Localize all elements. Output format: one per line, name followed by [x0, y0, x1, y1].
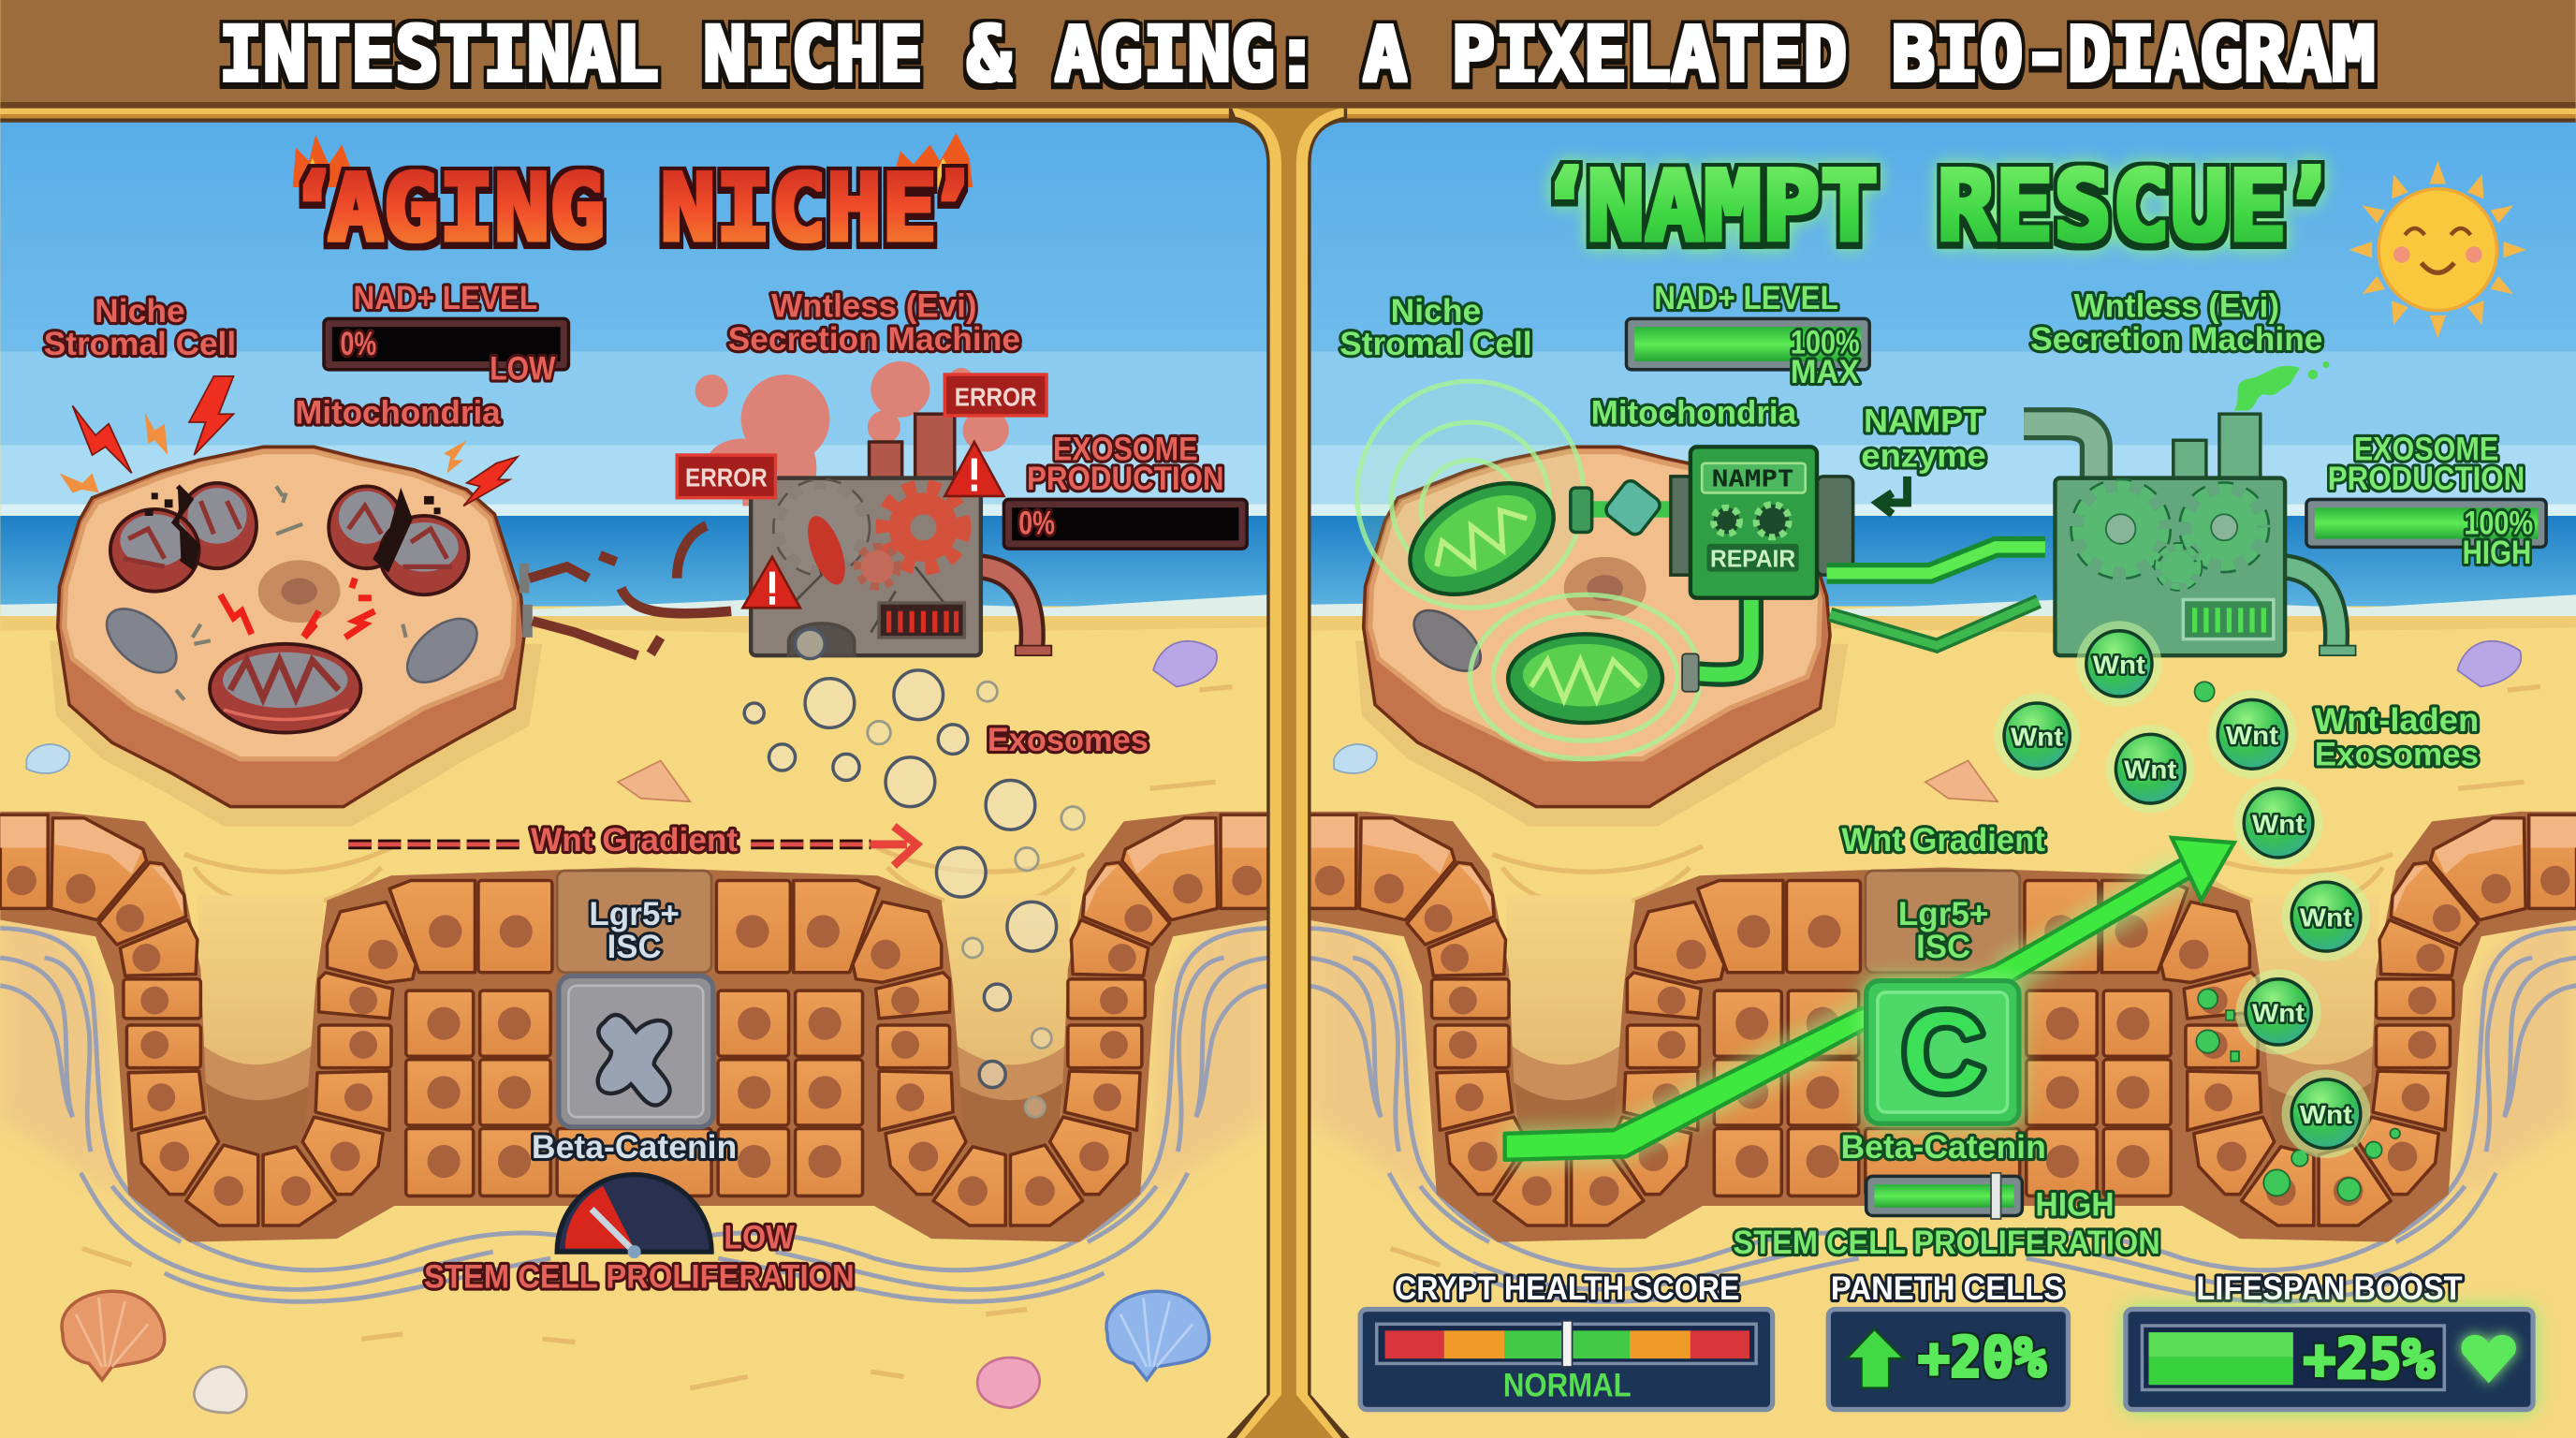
icon: lightning bolts: [59, 376, 518, 506]
icon: inactive beta-catenin: [598, 1015, 670, 1106]
icon: small gear: [857, 547, 897, 586]
background: beach scene: [1309, 122, 2576, 1438]
NAD+ meter: max: [1626, 280, 1869, 390]
icon: broken cables: [520, 526, 731, 655]
icon: gear right: [2187, 490, 2262, 565]
exosome production meter: empty: EXOSOME: [1053, 431, 1197, 467]
label: secretion machine: Wntless (Evi): [2074, 288, 2279, 325]
panel: NAMPT rescue: [1309, 122, 2576, 1438]
label: secretion machine: Secretion Machine: [728, 321, 1020, 358]
arrow: strong wnt gradient: [1505, 838, 2234, 1160]
label: Lgr5+ ISC: [1898, 896, 1988, 965]
icon: orange shell: [62, 1291, 165, 1380]
sub-title: aging niche: [285, 133, 979, 262]
stromal cell: [1355, 447, 1848, 827]
icon: red gear: [883, 486, 964, 568]
icon: overheating vent: [879, 603, 964, 638]
icon: damaged mitochondrion 3: [210, 644, 360, 733]
icon: pale pebble: [1334, 744, 1377, 773]
beta-catenin inactive block: [532, 976, 737, 1166]
heading text: ‘AGING NICHE’: [285, 155, 979, 262]
label: NAMPT enzyme: enzyme: [1861, 437, 1986, 474]
scorecard: paneth cells: PANETH CELLS: [1831, 1270, 2064, 1307]
header band: [0, 0, 2576, 102]
icon: return arrow: [1878, 477, 1908, 514]
label: NAMPT enzyme: [1861, 403, 1986, 514]
icon: NAMPT repair unit: NAMPT: [1712, 464, 1793, 492]
icon: heart: [2461, 1335, 2516, 1383]
stromal cell with damaged organelles: [50, 447, 542, 827]
label: niche stromal cell: [1339, 293, 1532, 362]
gauge: stem cell proliferation low: [424, 1175, 855, 1296]
gauge: stem cell proliferation low: STEM CELL PROLIFERATION: [424, 1259, 855, 1296]
error tag 1: [944, 374, 1046, 416]
stem cell proliferation meter: high: HIGH: [2035, 1186, 2115, 1223]
label: Lgr5+ ISC: Lgr5+: [1898, 896, 1988, 932]
icon: warning triangle left: [742, 557, 800, 608]
label: niche stromal cell: Niche: [1391, 293, 1481, 330]
exosome production meter: high: PRODUCTION: [2328, 461, 2525, 497]
icon: hatch: [789, 624, 855, 655]
icon: inner sparks: [220, 579, 374, 638]
background: beach scene: [0, 122, 1268, 1438]
icon: pink shell: [977, 1357, 1040, 1408]
wnt-laden exosomes: Wnt: [2011, 723, 2063, 752]
icon: repaired mitochondrion 1: [1391, 461, 1573, 617]
NAD+ meter: max: MAX: [1791, 354, 1860, 390]
exosome production meter: high: [2306, 431, 2546, 571]
icon: shells: [26, 641, 1217, 1413]
icon: purple shell: [2457, 641, 2521, 686]
label: Lgr5+ ISC: ISC: [1916, 929, 1970, 965]
NAD+ meter: max: 100%: [1791, 324, 1860, 360]
label: wnt gradient: Wnt Gradient: [1841, 822, 2045, 858]
icon: green vapour: [2234, 366, 2300, 411]
exosome production meter: high: EXOSOME: [2354, 431, 2498, 467]
icon: sun: [2349, 161, 2526, 338]
wnt-laden exosomes: Wnt: [2093, 650, 2145, 679]
label: secretion machine: [2030, 288, 2322, 358]
exosome production meter: high: HIGH: [2463, 535, 2531, 571]
scorecard: paneth cells: [1828, 1270, 2068, 1410]
label: mitochondria: Mitochondria: [295, 395, 501, 432]
icon: warning triangle right: [944, 442, 1003, 496]
label: secretion machine: Secretion Machine: [2030, 321, 2322, 358]
icon: pale pebble: [26, 744, 69, 773]
NAD+ meter: max: NAD+ LEVEL: [1654, 280, 1838, 316]
scorecard: lifespan boost: LIFESPAN BOOST: [2196, 1270, 2463, 1307]
NAD+ meter: low: LOW: [490, 350, 556, 387]
wnt-laden exosomes: [1995, 621, 2370, 1158]
wnt-laden exosomes: Wnt: [2300, 903, 2352, 932]
icon: gear small: [2159, 547, 2198, 586]
scorecard: crypt health score: CRYPT HEALTH SCORE: [1395, 1270, 1740, 1307]
NAD+ meter: low: NAD+ LEVEL: [354, 280, 537, 316]
icon: broken secretion machine: [677, 374, 1051, 659]
arrow: weak wnt gradient: Wnt Gradient: [531, 822, 738, 858]
icon: peach shell: [1925, 760, 1998, 801]
active beta-catenin block: C: [1902, 990, 1984, 1115]
icon: peach shell: [618, 760, 690, 801]
label: wnt-laden exosomes: Exosomes: [2315, 737, 2479, 773]
arrow: weak wnt gradient: [348, 822, 916, 866]
main title: INTESTINAL NICHE & AGING: A PIXELATED BIO-DIAGRAM: [219, 11, 2376, 99]
active beta-catenin block: Beta-Catenin: [1840, 1129, 2046, 1166]
label: niche stromal cell: [44, 293, 236, 362]
wnt-laden exosomes: Wnt: [2252, 998, 2305, 1027]
crypt epithelium: [1309, 812, 2576, 1301]
label: mitochondria: Mitochondria: [1591, 395, 1797, 432]
icon: wnt spores: [2195, 682, 2400, 1201]
icon: NAMPT repair unit: [1571, 447, 1853, 692]
NAD+ meter: low: 0%: [341, 326, 376, 362]
wnt-laden exosomes: Wnt: [2300, 1100, 2352, 1129]
green pipes to machine: [1827, 547, 2045, 646]
sub-title: NAMPT rescue: ‘NAMPT RESCUE’: [1537, 151, 2337, 263]
wnt-laden exosomes: Wnt: [2124, 756, 2176, 785]
exosome production meter: empty: 0%: [1018, 505, 1055, 541]
icon: trapped bubble: [796, 629, 825, 659]
label: NAMPT enzyme: NAMPT: [1864, 403, 1984, 439]
NAD+ meter: low: [324, 280, 568, 387]
active beta-catenin block: [1840, 981, 2046, 1166]
icon: grey mitochondria: [95, 596, 489, 695]
icon: NAMPT repair unit: REPAIR: [1710, 544, 1795, 572]
label: niche stromal cell: Stromal Cell: [44, 326, 236, 362]
icon: debris: [176, 486, 406, 700]
error tag 2: ERROR: [685, 462, 768, 492]
scorecard: lifespan boost: [2126, 1270, 2533, 1410]
panel: aging niche: [0, 122, 1268, 1438]
exosome production meter: empty: PRODUCTION: [1027, 461, 1224, 497]
stem cell proliferation meter: high: STEM CELL PROLIFERATION: [1734, 1225, 2160, 1261]
icon: grey gear: [781, 486, 863, 590]
icon: vent: [2183, 599, 2274, 639]
scorecard: crypt health score: NORMAL: [1503, 1368, 1632, 1404]
label: secretion machine: [728, 288, 1020, 358]
icon: white shell: [194, 1367, 247, 1413]
icon: smoke: [695, 361, 1009, 506]
gauge: stem cell proliferation low: LOW: [724, 1220, 796, 1256]
icon: repaired mitochondrion 2: [1508, 634, 1662, 723]
icon: working secretion machine: [2024, 361, 2356, 655]
scorecard: lifespan boost: +25%: [2303, 1328, 2435, 1392]
wnt-laden exosomes: Wnt: [2226, 721, 2278, 750]
wnt-laden exosomes: Wnt: [2252, 810, 2305, 839]
icon: gear large: [2078, 486, 2163, 572]
icon: energy rings: [1357, 381, 1700, 759]
icon: shells: [1334, 641, 2521, 801]
crypt epithelium: [0, 812, 1268, 1301]
icon: grey mitochondrion: [1403, 599, 1491, 682]
icon: flames: [293, 133, 973, 187]
beta-catenin inactive block: Beta-Catenin: [532, 1129, 737, 1166]
error tag 2: [677, 455, 776, 498]
exosome production meter: empty: [1003, 431, 1247, 549]
scorecard: paneth cells: +20%: [1918, 1326, 2046, 1390]
error tag 1: ERROR: [955, 382, 1037, 411]
icon: purple shell: [1153, 641, 1217, 686]
icon: small gears: [1713, 505, 1789, 537]
label: Lgr5+ ISC: [589, 896, 680, 965]
icon: damaged mitochondrion 1: [110, 483, 256, 592]
exosome bubbles: [744, 670, 1084, 1117]
scorecard: crypt health score: [1360, 1270, 1773, 1410]
stem cell proliferation meter: high: [1734, 1173, 2160, 1261]
label: exosomes: Exosomes: [988, 722, 1149, 758]
icon: damaged mitochondrion 2: [329, 486, 468, 594]
label: Lgr5+ ISC: ISC: [607, 929, 662, 965]
icon: blue shell: [1106, 1291, 1209, 1380]
label: wnt-laden exosomes: [2315, 702, 2479, 773]
label: secretion machine: Wntless (Evi): [771, 288, 976, 325]
label: wnt-laden exosomes: Wnt-laden: [2315, 702, 2479, 739]
label: Lgr5+ ISC: Lgr5+: [589, 896, 680, 932]
exosome production meter: high: 100%: [2464, 505, 2533, 541]
icon: up arrow: [1847, 1329, 1904, 1388]
label: niche stromal cell: Niche: [95, 293, 185, 330]
label: niche stromal cell: Stromal Cell: [1339, 326, 1532, 362]
